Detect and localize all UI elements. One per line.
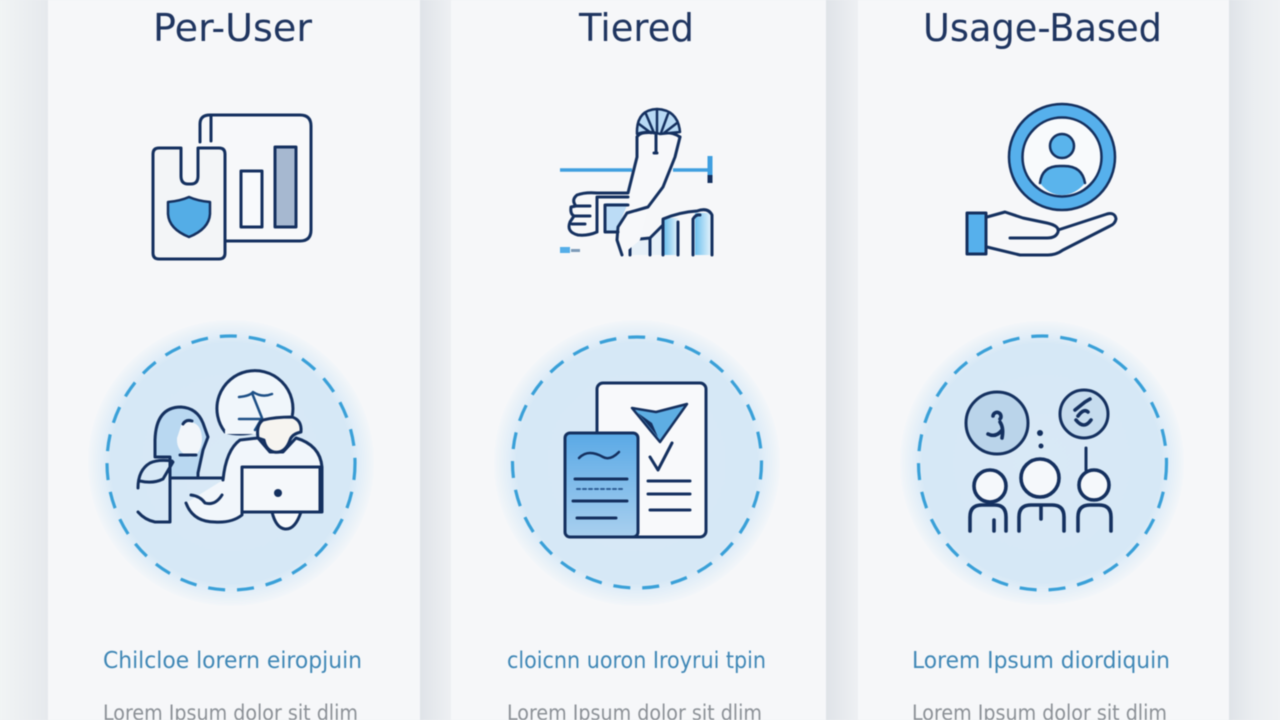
icon: arm with fan and bars: [560, 109, 712, 255]
panel: Tiered: [451, 0, 826, 720]
heading: Per-User: Per-User: [153, 6, 312, 50]
panel: Per-User: [48, 0, 420, 720]
icon: ID card with bar chart: [153, 115, 311, 259]
panel: Usage-Based: [858, 0, 1229, 720]
subheading: Chilcloe lorern eiropjuin: [103, 648, 362, 674]
illustration: two people with laptop in dashed circle: [88, 320, 374, 606]
icon: hand holding user badge: [967, 104, 1116, 255]
illustration: three users with coins in dashed circle: [900, 321, 1184, 605]
heading: Usage-Based: Usage-Based: [923, 6, 1162, 50]
subheading: Lorem Ipsum diordiquin: [912, 648, 1170, 674]
illustration: documents with check in dashed circle: [494, 320, 780, 606]
heading: Tiered: Tiered: [578, 6, 694, 50]
subheading: cloicnn uoron Iroyrui tpin: [507, 648, 766, 674]
